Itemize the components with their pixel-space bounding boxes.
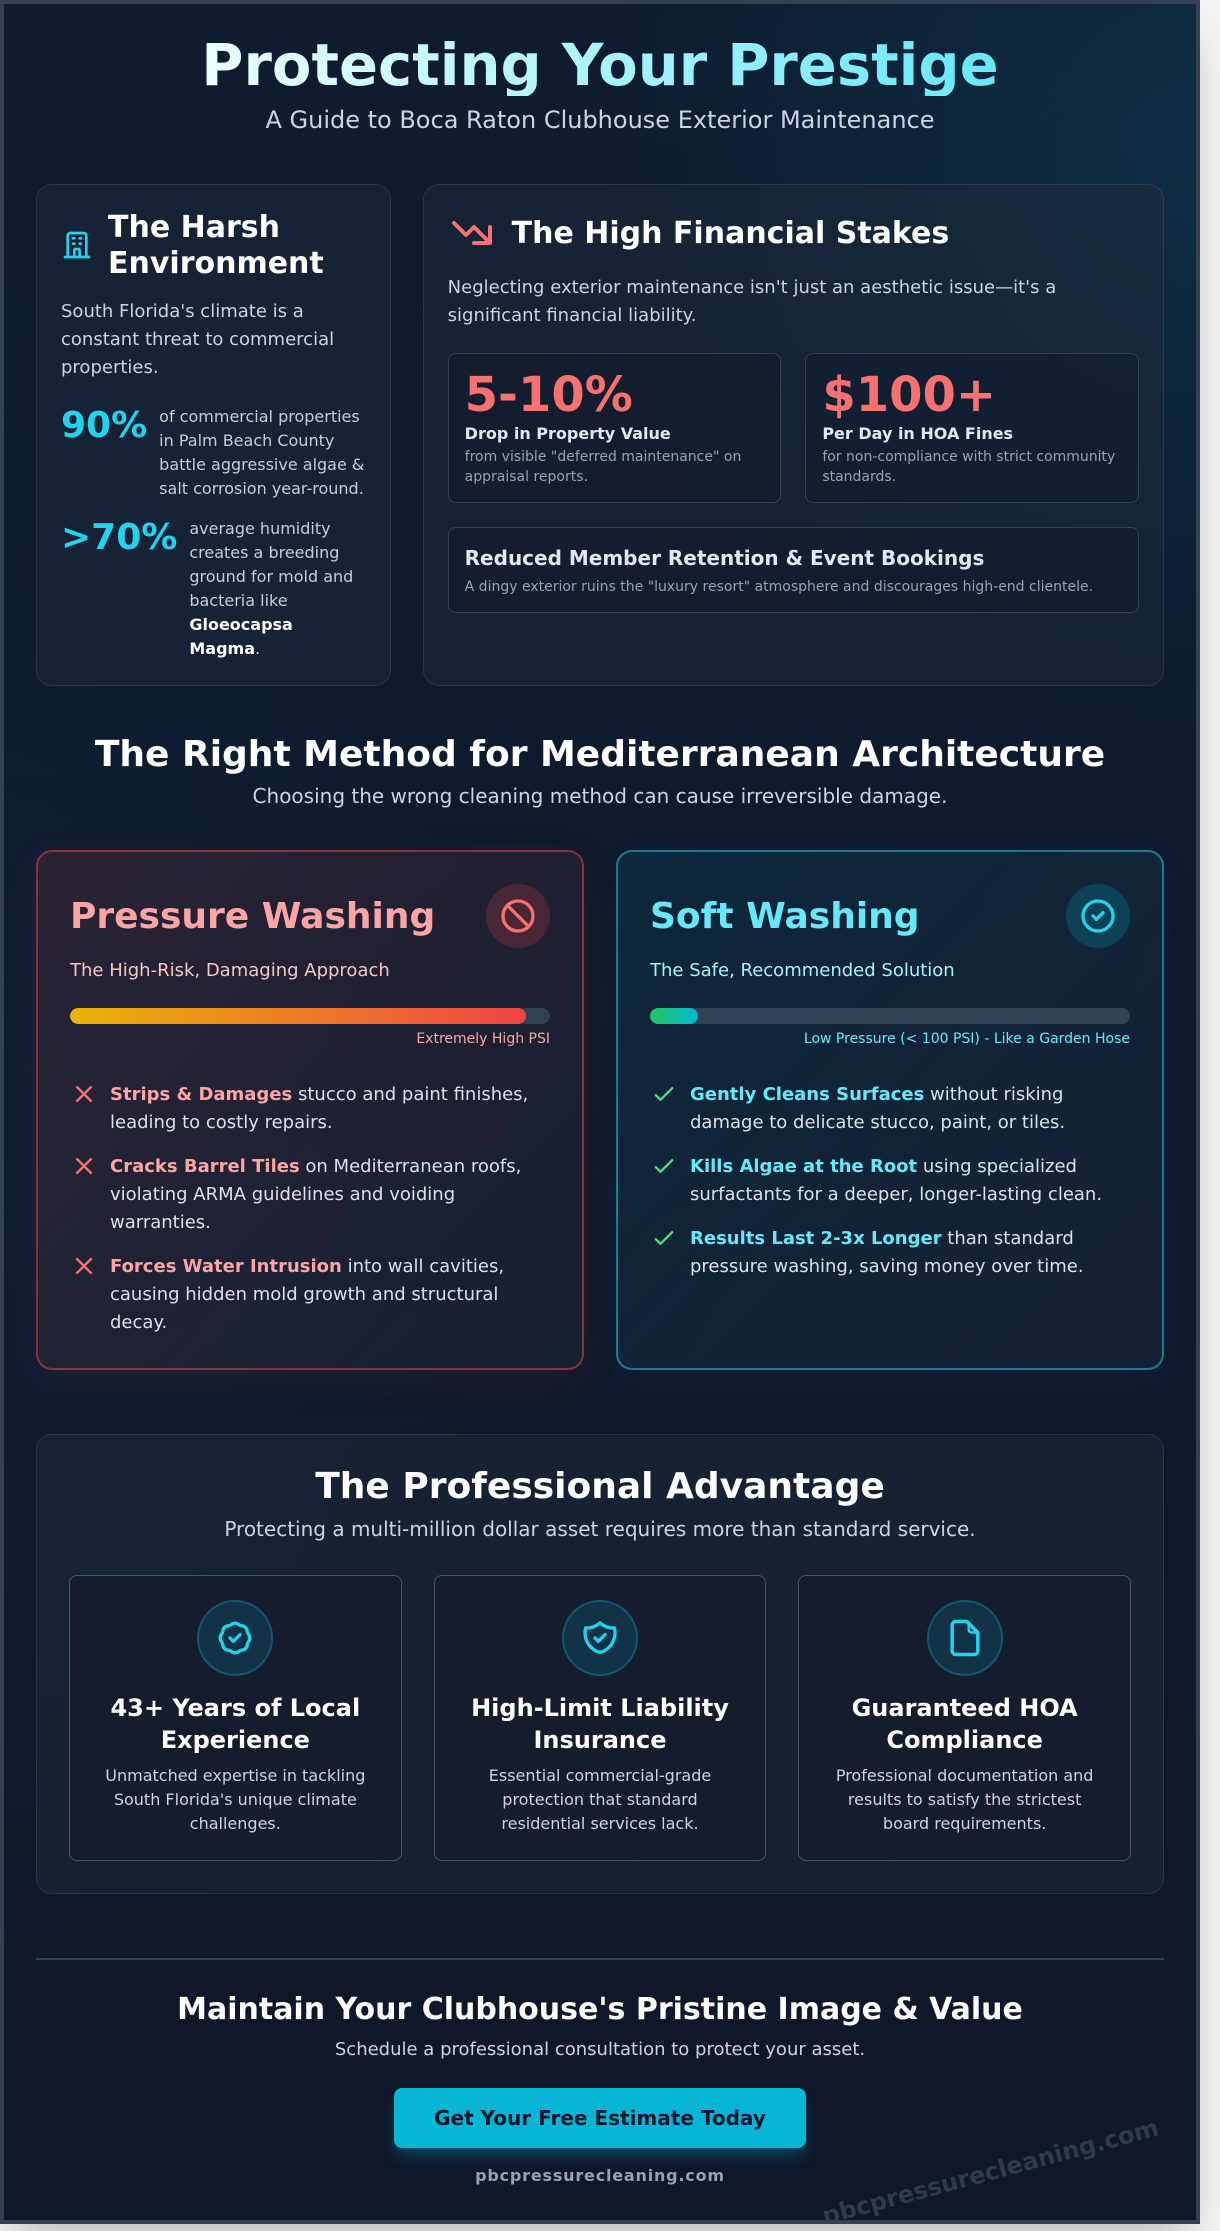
pressure bar — [70, 1008, 550, 1024]
icon: office building — [64, 232, 90, 258]
stat: >70% — [61, 517, 353, 658]
header — [201, 32, 999, 134]
benefit item: Results Last 2-3x Longer than standard pressure washing, saving money over time. — [690, 1228, 1084, 1277]
method subtitle: The High-Risk, Damaging Approach — [70, 960, 390, 981]
stat card: HOA fines: for non-compliance with strict community standards. — [822, 449, 1115, 485]
risks list — [76, 1084, 528, 1333]
card: insurance: High-Limit Liability Insurance — [471, 1694, 729, 1754]
benefits list — [654, 1084, 1102, 1277]
stat card: property value: 5-10% — [465, 367, 633, 423]
icon: prohibited — [486, 884, 550, 948]
intro text: Neglecting exterior maintenance isn't just an aesthetic issue—it's a significant financial liability. — [448, 277, 1056, 326]
panel: soft washing — [616, 850, 1164, 1370]
stat card: HOA fines: Per Day in HOA Fines — [822, 424, 1013, 443]
stat: >70%: average humidity creates a breeding ground for mold and bacteria like Gloeocapsa Magma. — [189, 519, 353, 658]
pressure bar — [650, 1008, 1130, 1024]
intro text: South Florida's climate is a constant threat to commercial properties. — [61, 301, 334, 378]
subheading: Protecting a multi-million dollar asset requires more than standard service. — [224, 1517, 976, 1541]
card: experience: 43+ Years of Local Experience — [110, 1694, 360, 1754]
benefit item: Kills Algae at the Root using specialized surfactants for a deeper, longer-lasting clean. — [690, 1156, 1102, 1205]
panel heading: The High Financial Stakes — [512, 216, 949, 251]
risk item: Forces Water Intrusion into wall cavities, causing hidden mold growth and structural decay. — [110, 1256, 504, 1333]
panel: pressure washing — [36, 850, 584, 1370]
panel header — [650, 884, 1130, 948]
icon: document — [927, 1600, 1003, 1676]
top panels row — [36, 184, 1164, 686]
card: experience — [69, 1575, 402, 1861]
card: insurance — [434, 1575, 766, 1861]
card: experience: Unmatched expertise in tackling South Florida's unique climate challenges. — [105, 1766, 365, 1833]
wide card: member retention: Reduced Member Retention & Event Bookings — [465, 546, 984, 570]
risk item: Cracks Barrel Tiles on Mediterranean roofs, violating ARMA guidelines and voiding warranties. — [110, 1156, 521, 1233]
card: insurance: Essential commercial-grade protection that standard residential services lack. — [489, 1766, 711, 1833]
call to action — [36, 1958, 1164, 2188]
pressure label: Extremely High PSI — [416, 1031, 550, 1047]
icon: trending down arrow — [452, 220, 492, 246]
stat card: HOA fines: $100+ — [822, 367, 996, 423]
stat card: HOA fines — [805, 353, 1139, 503]
panel header: Pressure Washing — [70, 896, 435, 937]
title: Protecting Your Prestige — [201, 32, 999, 99]
stat cards — [448, 353, 1139, 503]
stat: >70%: >70% — [61, 517, 177, 558]
stat card: property value — [448, 353, 781, 503]
subtitle: A Guide to Boca Raton Clubhouse Exterior Maintenance — [265, 106, 935, 134]
section heading: The Right Method for Mediterranean Architecture — [95, 734, 1105, 775]
card: compliance: Professional documentation and results to satisfy the strictest board requirements. — [836, 1766, 1093, 1833]
card: compliance: Guaranteed HOA Compliance — [852, 1694, 1078, 1754]
method subtitle: The Safe, Recommended Solution — [650, 960, 955, 981]
risk item: Strips & Damages stucco and paint finishes, leading to costly repairs. — [110, 1084, 528, 1133]
panel: the high financial stakes — [423, 184, 1164, 686]
stat card: property value: from visible "deferred maintenance" on appraisal reports. — [465, 449, 741, 485]
stat: 90%: of commercial properties in Palm Beach County battle aggressive algae & salt corrosion year-round. — [159, 407, 364, 498]
cta button — [394, 2088, 806, 2148]
stat card: property value: Drop in Property Value — [465, 424, 671, 443]
wide card: member retention — [448, 527, 1139, 613]
panel header: Soft Washing — [650, 896, 920, 937]
cta text: Schedule a professional consultation to protect your asset. — [335, 2039, 865, 2060]
panel: the professional advantage — [36, 1434, 1164, 1894]
stat: 90%: 90% — [61, 405, 147, 446]
heading: The Professional Advantage — [315, 1466, 885, 1507]
section subheading: Choosing the wrong cleaning method can cause irreversible damage. — [253, 784, 947, 808]
card: compliance — [798, 1575, 1131, 1861]
icon: check circle — [1066, 884, 1130, 948]
cta button: Get Your Free Estimate Today — [434, 2106, 766, 2130]
panel heading: The Harsh Environment — [108, 210, 324, 281]
benefit item: Gently Cleans Surfaces without risking damage to delicate stucco, paint, or tiles. — [690, 1084, 1065, 1133]
cta heading: Maintain Your Clubhouse's Pristine Image & Value — [177, 1992, 1023, 2027]
icon: shield check — [562, 1600, 638, 1676]
pressure label: Low Pressure (< 100 PSI) - Like a Garden Hose — [804, 1031, 1130, 1047]
website: pbcpressurecleaning.com — [475, 2166, 725, 2185]
panel: the harsh environment — [36, 184, 391, 686]
comparison panels — [36, 850, 1164, 1379]
icon: badge check — [197, 1600, 273, 1676]
stat: 90% — [61, 405, 364, 498]
wide card: member retention: A dingy exterior ruins the "luxury resort" atmosphere and discourages high-end clientele. — [465, 579, 1093, 595]
panel header — [70, 884, 550, 948]
advantage cards — [69, 1575, 1131, 1861]
